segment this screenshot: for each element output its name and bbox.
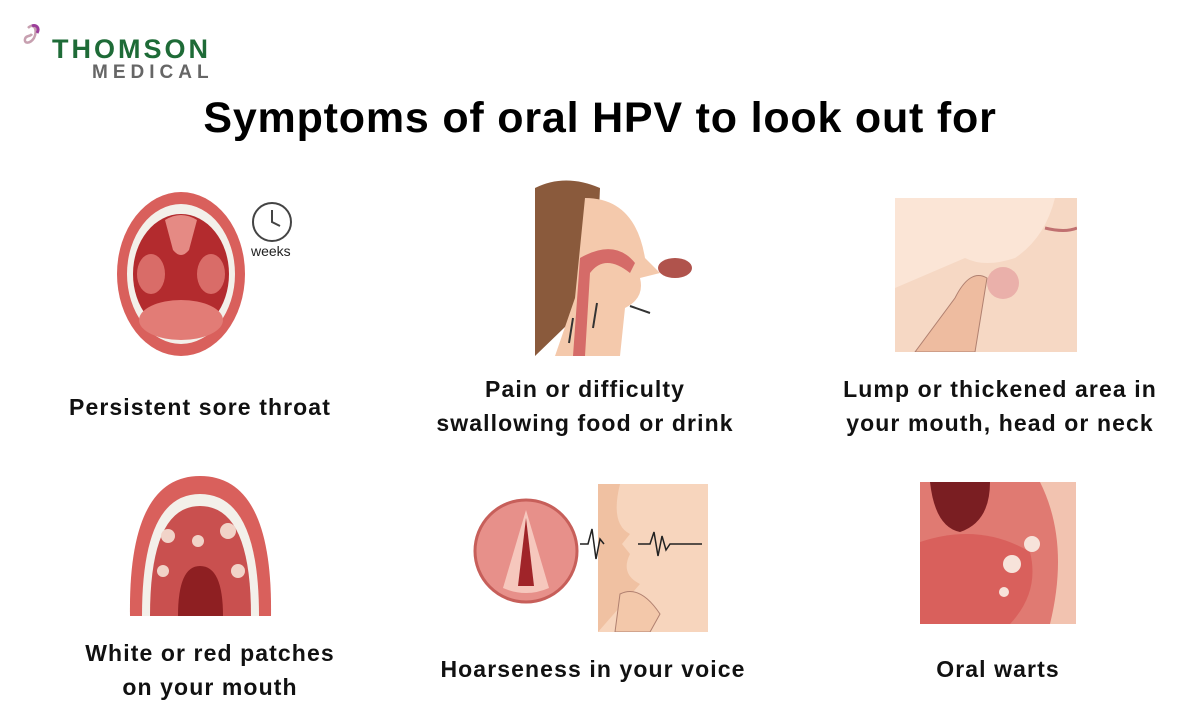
label: patches (85, 640, 335, 700)
label: swallowing (436, 376, 734, 436)
icon: vocal cords (474, 498, 578, 604)
illustration: face with sound (580, 484, 708, 632)
label: swallowing: swallowing food or drink (436, 410, 734, 436)
panel: lump (895, 198, 1077, 352)
label: lump: your mouth, head or neck (846, 410, 1154, 436)
panel: swallowing (535, 180, 692, 356)
logo (24, 24, 214, 83)
panel: warts (920, 482, 1076, 624)
panel: hoarseness (474, 484, 708, 632)
logo text: THOMSON (52, 34, 211, 64)
icon: logo heart (24, 24, 40, 44)
text: weeks: weeks (251, 243, 291, 259)
icon: mouth with patches (130, 476, 272, 616)
label: warts: Oral warts (936, 656, 1060, 682)
label: patches: White or red patches (85, 640, 335, 666)
illustration: profile swallowing (535, 180, 692, 356)
label: sore throat: Persistent sore throat (69, 394, 331, 420)
illustration: neck with finger (895, 198, 1077, 352)
illustration: mouth with warts (920, 482, 1076, 624)
icon: open mouth (117, 192, 245, 356)
logo: MEDICAL (92, 62, 214, 83)
label: patches: on your mouth (122, 674, 298, 700)
label: lump (843, 376, 1157, 436)
panel: patches (130, 476, 272, 616)
icon: clock (252, 202, 292, 242)
label: lump: Lump or thickened area in (843, 376, 1157, 402)
label: swallowing: Pain or difficulty (485, 376, 685, 402)
title: Symptoms of oral HPV to look out for (203, 94, 997, 142)
panel: sore throat (117, 192, 292, 356)
label: hoarseness: Hoarseness in your voice (440, 656, 746, 682)
